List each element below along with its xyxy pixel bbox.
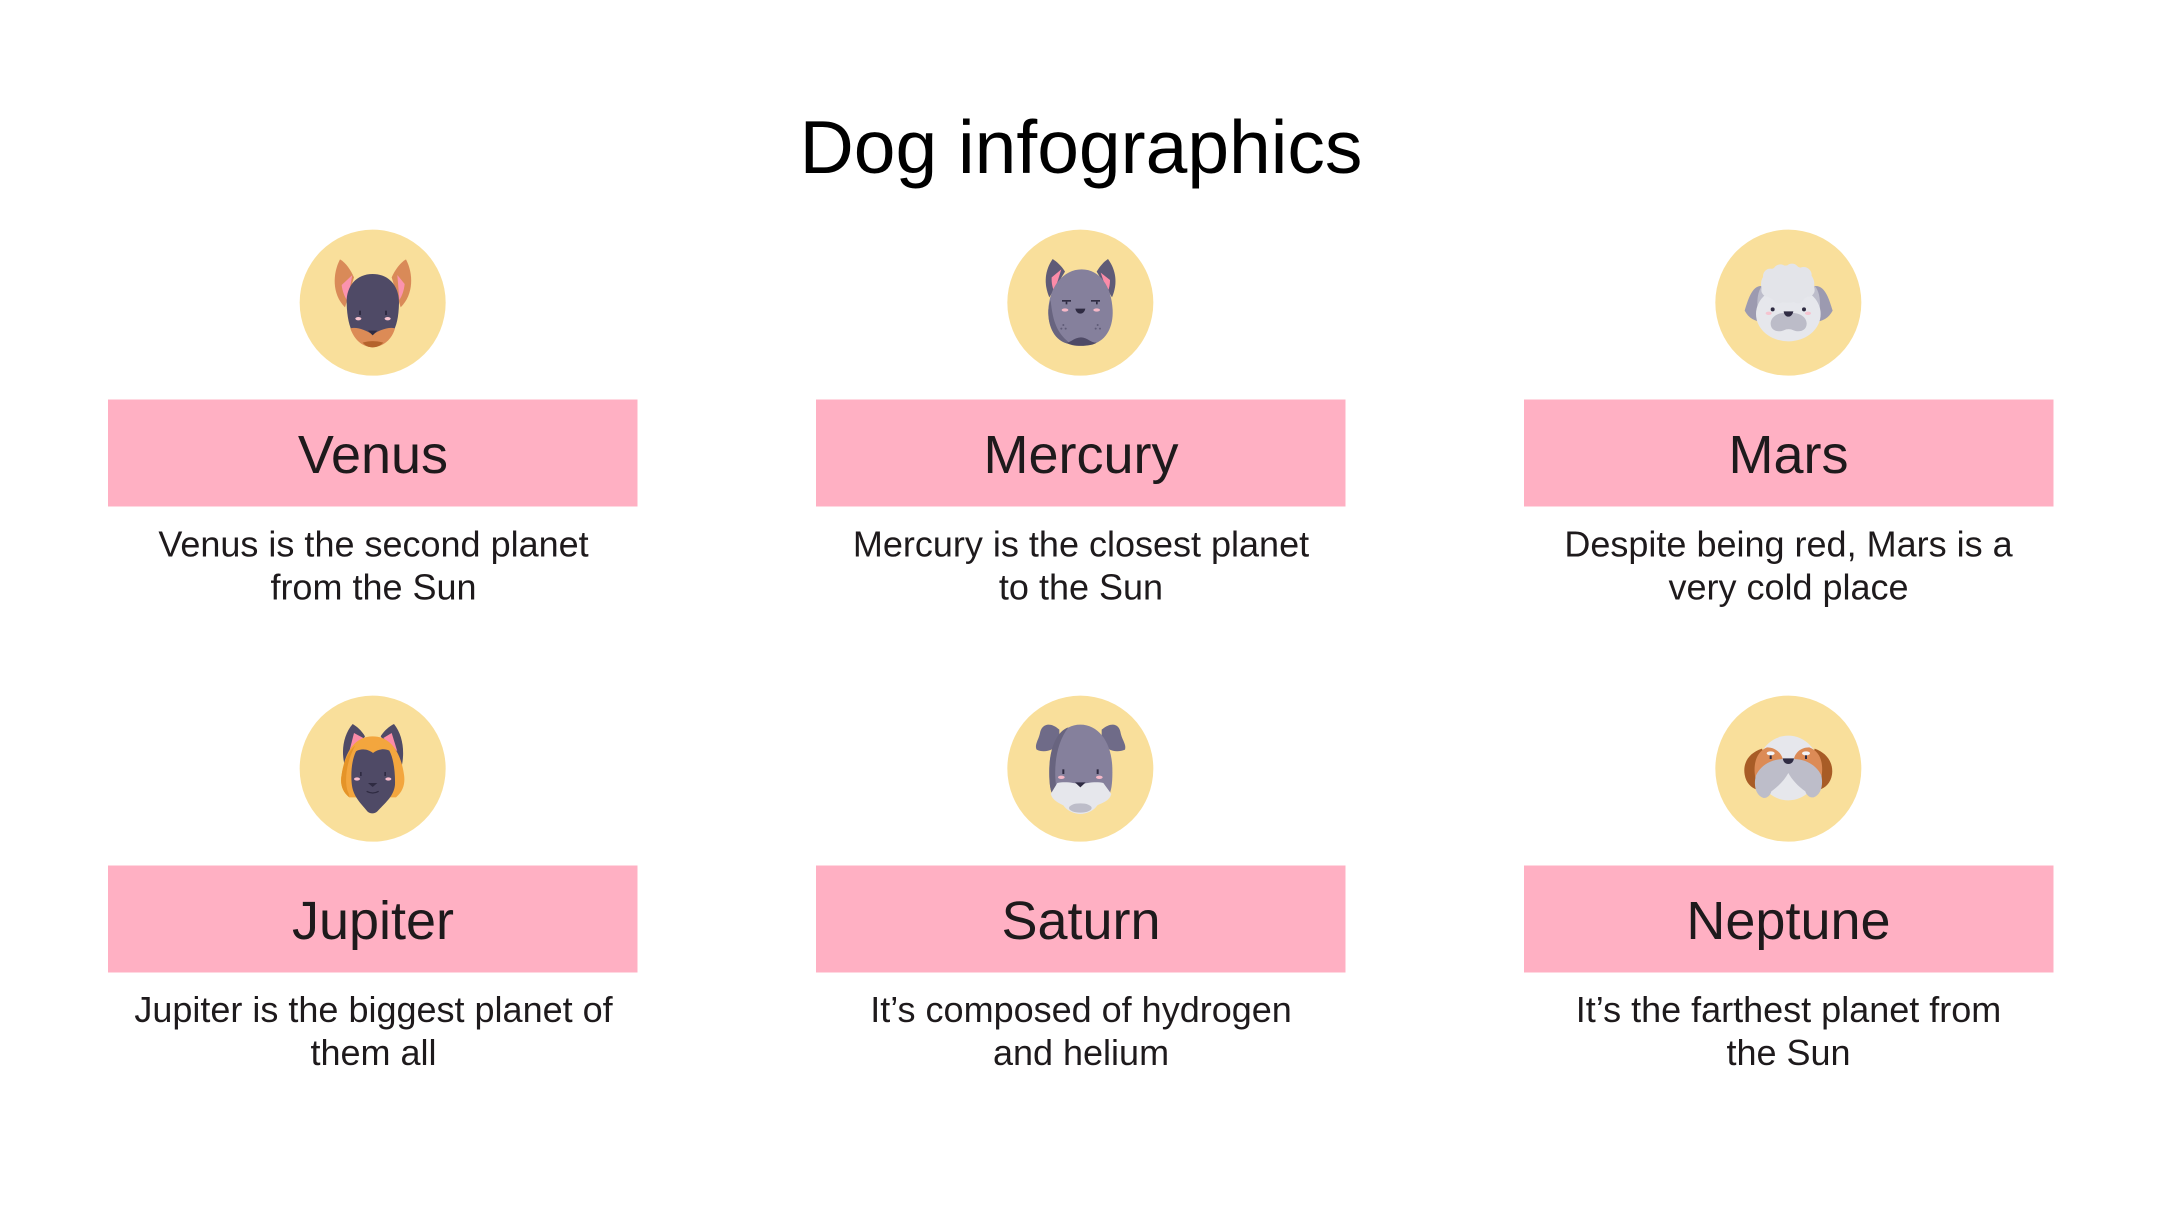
- description: It’s the farthest planet from: [1576, 989, 2001, 1030]
- name banner: [816, 400, 1346, 506]
- description: them all: [310, 1032, 437, 1073]
- panel: Mars: [1524, 230, 2054, 608]
- description: It’s composed of hydrogen: [870, 989, 1292, 1030]
- icon: schnauzer: [1007, 696, 1153, 842]
- icon: german shepherd: [300, 696, 446, 842]
- heading: Jupiter: [292, 891, 454, 951]
- description: and helium: [993, 1032, 1169, 1073]
- description: the Sun: [1726, 1032, 1851, 1073]
- panel: Neptune: [1524, 696, 2054, 1073]
- name banner: [816, 866, 1346, 972]
- title: Dog infographics: [800, 105, 1362, 189]
- description: Despite being red, Mars is a: [1564, 524, 2014, 564]
- icon: grey bat-eared dog: [1007, 230, 1153, 376]
- panel: Venus: [108, 230, 638, 608]
- heading: Saturn: [1001, 891, 1161, 951]
- heading: Neptune: [1686, 891, 1891, 951]
- description: Venus is the second planet: [158, 524, 589, 564]
- icon: bulldog: [1715, 696, 1861, 842]
- name banner: [108, 400, 638, 506]
- name banner: [108, 866, 638, 972]
- panel: Saturn: [816, 696, 1346, 1073]
- description: Jupiter is the biggest planet of: [134, 989, 614, 1030]
- icon: white poodle: [1715, 230, 1861, 376]
- description: Mercury is the closest planet: [853, 524, 1309, 564]
- heading: Venus: [298, 425, 448, 485]
- name banner: [1524, 866, 2054, 972]
- heading: Mercury: [983, 425, 1179, 485]
- icon: doberman dog: [300, 230, 446, 376]
- description: very cold place: [1668, 566, 1909, 608]
- name banner: [1524, 400, 2054, 506]
- description: to the Sun: [999, 566, 1163, 608]
- panel: Mercury: [816, 230, 1346, 608]
- description: from the Sun: [270, 566, 477, 608]
- heading: Mars: [1728, 425, 1848, 485]
- panel: Jupiter: [108, 696, 638, 1073]
